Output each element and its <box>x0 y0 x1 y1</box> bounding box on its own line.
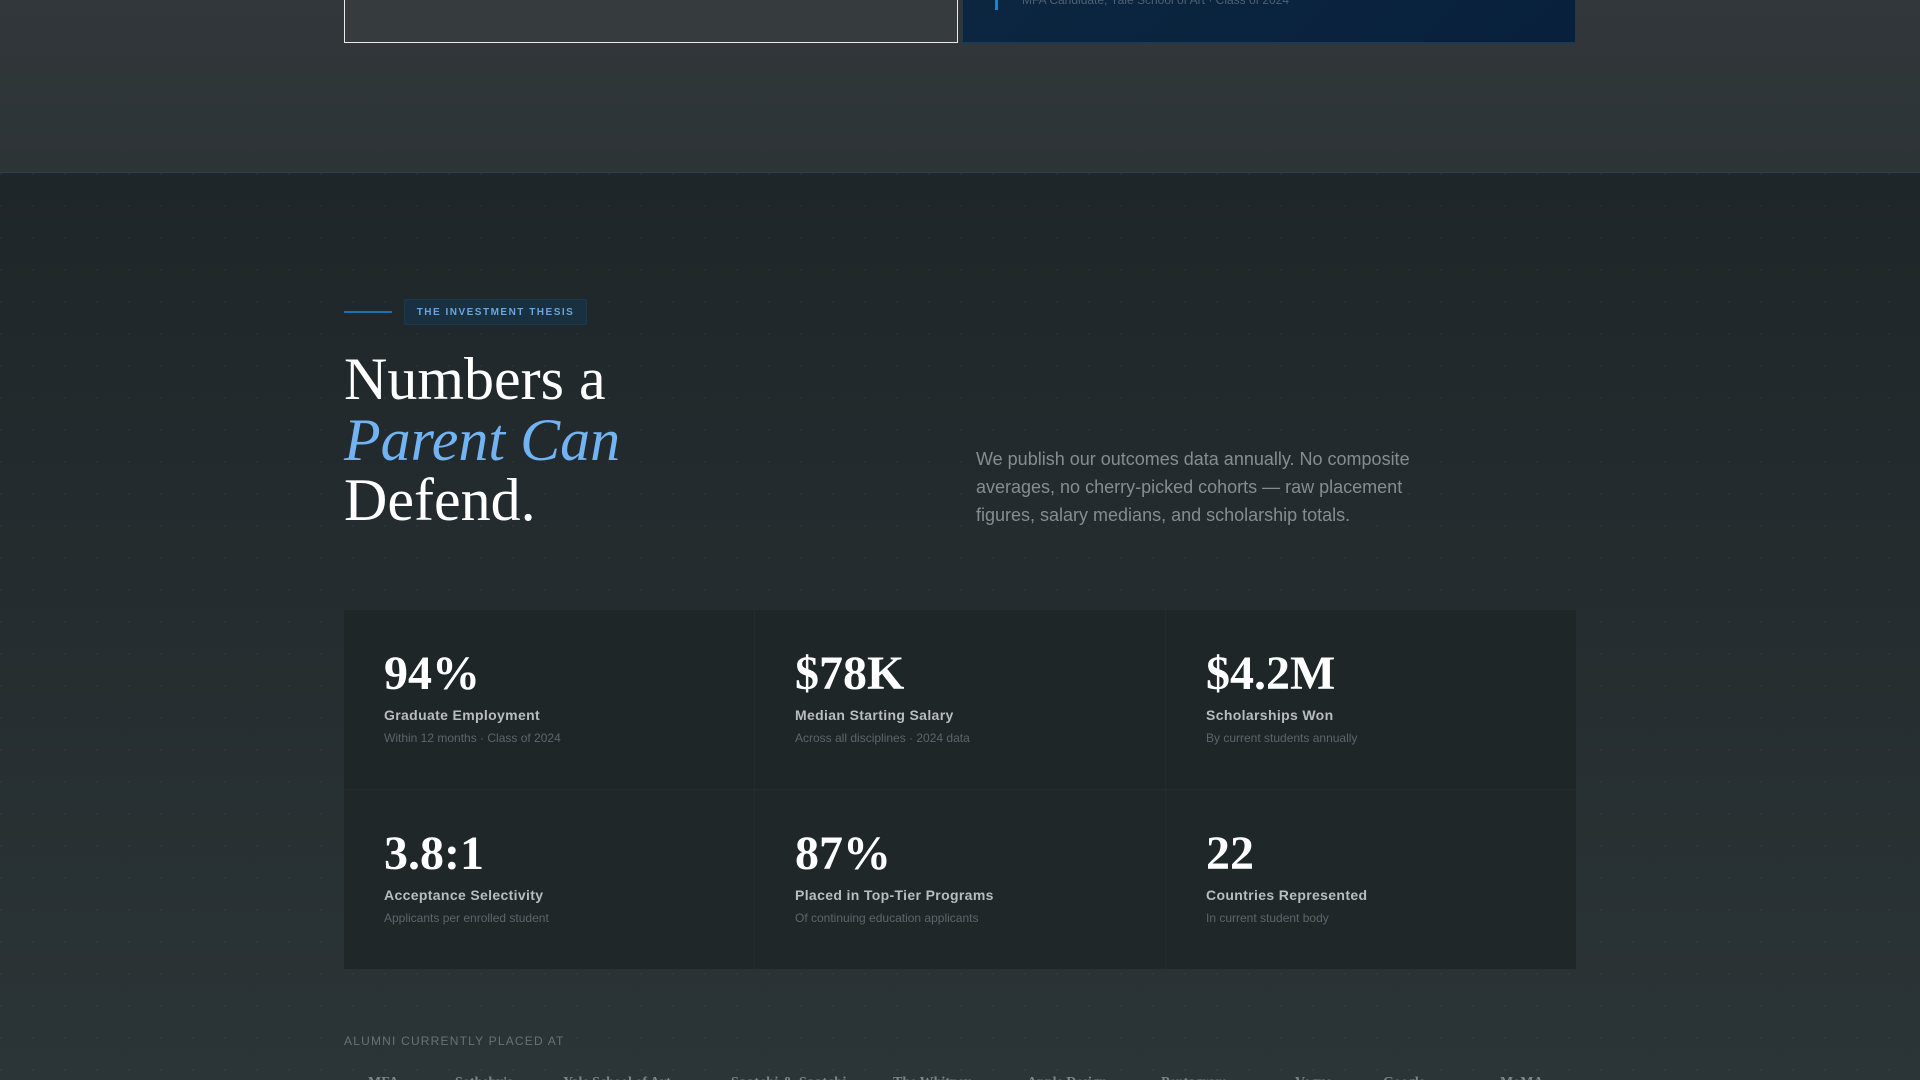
stat: graduate employment: Within 12 months · Class of 2024 <box>384 731 561 745</box>
intro paragraph: figures, salary medians, and scholarship totals. <box>976 505 1350 525</box>
stat: median starting salary <box>755 610 1165 789</box>
stat: countries represented <box>1166 790 1576 969</box>
stat: countries represented: Countries Represented <box>1206 887 1367 903</box>
heading <box>344 346 620 533</box>
stat: graduate employment: 94% <box>384 647 480 700</box>
heading: Defend. <box>344 467 536 533</box>
stat: scholarships won: By current students annually <box>1206 731 1357 745</box>
eyebrow rule <box>344 311 392 313</box>
stat: top-tier placement: Of continuing education applicants <box>795 911 978 925</box>
stat: scholarships won <box>1166 610 1576 789</box>
alumni label: ALUMNI CURRENTLY PLACED AT <box>344 1034 565 1048</box>
stat: acceptance selectivity: 3.8:1 <box>384 827 484 880</box>
stat: acceptance selectivity: Applicants per enrolled student <box>384 911 549 925</box>
stat: acceptance selectivity: Acceptance Selectivity <box>384 887 543 903</box>
stat: graduate employment <box>344 610 754 789</box>
accent bar <box>995 0 998 10</box>
testimonial card: left <box>344 0 958 43</box>
stat: graduate employment: Graduate Employment <box>384 707 540 723</box>
stat: top-tier placement <box>755 790 1165 969</box>
stat: scholarships won: $4.2M <box>1206 647 1335 700</box>
stat: scholarships won: Scholarships Won <box>1206 707 1333 723</box>
stat: countries represented: 22 <box>1206 827 1254 880</box>
stat: acceptance selectivity <box>344 790 754 969</box>
stat: top-tier placement: Placed in Top-Tier Programs <box>795 887 994 903</box>
eyebrow tag <box>404 299 587 325</box>
intro paragraph <box>976 449 1410 525</box>
stat: median starting salary: $78K <box>795 647 904 700</box>
eyebrow tag: THE INVESTMENT THESIS <box>417 307 574 318</box>
heading: Numbers a <box>344 346 606 412</box>
intro paragraph: We publish our outcomes data annually. No composite <box>976 449 1410 469</box>
stat: countries represented: In current student body <box>1206 911 1329 925</box>
stat: top-tier placement: 87% <box>795 827 891 880</box>
stat: median starting salary: Median Starting Salary <box>795 707 954 723</box>
testimonial card: right <box>962 0 1576 44</box>
stats grid <box>344 610 1576 969</box>
previous section background <box>0 0 1920 172</box>
intro paragraph: averages, no cherry-picked cohorts — raw placement <box>976 477 1402 497</box>
heading: Parent Can <box>344 407 620 473</box>
stat: median starting salary: Across all disciplines · 2024 data <box>795 731 970 745</box>
